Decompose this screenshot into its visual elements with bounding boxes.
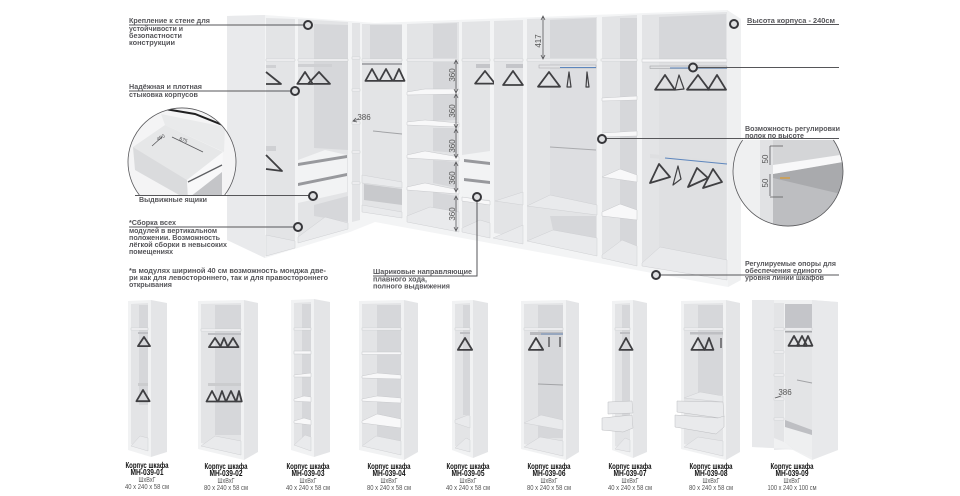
footnote: door mounting: ри как для левостороннего, так и для правостороннего <box>129 274 329 282</box>
callout: wall mounting: конструкции <box>129 39 175 47</box>
product caption: MH-039-04: Корпус шкафа <box>368 462 411 471</box>
product caption: MH-039-03: 40 х 240 х 58 см <box>286 485 330 492</box>
section D <box>527 17 597 256</box>
product caption: MH-039-03: МН-039-03 <box>292 469 325 478</box>
callout: rod <box>689 64 839 72</box>
module MH-039-09: 386 <box>778 388 792 397</box>
callout: drawers <box>135 192 317 204</box>
corner hanging section <box>362 24 404 218</box>
product caption: MH-039-08 <box>689 462 733 492</box>
section B with drawers <box>462 21 495 238</box>
callout: vertical assembly: *Сборка всех <box>129 219 176 227</box>
product caption: MH-039-09 <box>768 462 817 492</box>
callout: drawers: Выдвижные ящики <box>139 196 207 204</box>
product caption: MH-039-07: Корпус шкафа <box>608 462 652 471</box>
magnifier: drawer detail <box>128 108 236 195</box>
callout: wall mounting: устойчивости и <box>129 25 183 33</box>
product caption: MH-039-05: 40 х 240 х 58 см <box>446 485 490 492</box>
callout: vertical assembly <box>129 219 302 256</box>
callout: vertical assembly: лёгкой сборки в невысоких <box>129 241 227 249</box>
product caption: MH-039-09: ШхВхГ <box>784 478 801 485</box>
callout: height <box>730 17 839 28</box>
magnifier: shelf adjustment: 50 <box>761 154 770 163</box>
product caption: MH-039-01 <box>125 461 169 491</box>
magnifier: shelf adjustment <box>730 140 845 230</box>
magnifier: drawer detail: 675 <box>178 136 188 145</box>
dimension markers: 386 <box>357 113 371 122</box>
product caption: MH-039-03: ШхВхГ <box>300 478 317 485</box>
module MH-039-04 <box>359 300 418 460</box>
callout: tight joint: Надёжная и плотная <box>129 83 202 91</box>
callout: height: Высота корпуса - 240см <box>747 17 835 25</box>
product caption: MH-039-03 <box>286 462 330 492</box>
product caption: MH-039-03: Корпус шкафа <box>286 462 330 471</box>
callout: adjustable feet: уровня линии шкафов <box>745 274 825 282</box>
product caption: MH-039-01: 40 х 240 х 58 см <box>125 484 169 491</box>
product caption: MH-039-06: Корпус шкафа <box>528 462 571 471</box>
product caption: MH-039-06: МН-039-06 <box>532 469 566 478</box>
dimension markers <box>353 16 545 231</box>
callout: vertical assembly: модулей в вертикальном <box>129 227 217 235</box>
product caption: MH-039-08: Корпус шкафа <box>690 462 733 471</box>
product caption: MH-039-02 <box>204 462 248 492</box>
callout: wall mounting: Крепление к стене для <box>129 17 210 25</box>
callout: vertical assembly: положении. Возможность <box>129 234 221 242</box>
product caption: MH-039-01: МН-039-01 <box>130 468 164 477</box>
main wardrobe assembly <box>227 10 741 287</box>
product caption: MH-039-02: 80 х 240 х 58 см <box>204 485 248 492</box>
product caption: MH-039-02: ШхВхГ <box>218 478 235 485</box>
callout: wall mounting: безопастности <box>129 32 182 40</box>
product caption: MH-039-04: 80 х 240 х 58 см <box>367 485 411 492</box>
callout: ball guides: Шариковые направляющие <box>373 268 472 276</box>
magnifier: drawer detail: 490 <box>156 133 166 143</box>
product caption: MH-039-08: ШхВхГ <box>702 478 720 485</box>
product caption: MH-039-05: ШхВхГ <box>460 478 477 485</box>
product caption: MH-039-05: МН-039-05 <box>452 469 485 478</box>
product caption: MH-039-04: ШхВхГ <box>380 478 398 485</box>
product caption: MH-039-09: МН-039-09 <box>776 469 809 478</box>
callout: wall mounting <box>129 17 312 47</box>
callout: ball guides <box>373 193 481 290</box>
section E shelves <box>601 15 637 266</box>
callout: ball guides: плавного хода, <box>373 276 427 284</box>
product caption: MH-039-06: 80 х 240 х 58 см <box>527 485 571 492</box>
product caption: MH-039-07 <box>608 462 652 492</box>
module MH-039-03 <box>291 299 330 457</box>
section C <box>493 20 523 244</box>
callout: adjustable feet <box>652 260 839 282</box>
dimension markers: 360 <box>448 104 457 118</box>
section 1 left <box>266 18 295 256</box>
product caption: MH-039-01: Корпус шкафа <box>126 461 169 470</box>
product caption: MH-039-09: Корпус шкафа <box>770 462 814 471</box>
callout: tight joint: стыковка корпусов <box>129 91 199 99</box>
callout: adjustable feet: обеспечения единого <box>745 267 823 275</box>
product caption: MH-039-07: ШхВхГ <box>622 478 639 485</box>
dimension markers: 360 <box>448 68 457 82</box>
section A shelves with dimensions <box>407 22 459 232</box>
module MH-039-07 <box>602 300 647 458</box>
product caption: MH-039-08: МН-039-08 <box>694 469 728 478</box>
magnifier: shelf adjustment: 50 <box>761 178 770 187</box>
module MH-039-08 <box>675 300 740 460</box>
product caption: MH-039-02: Корпус шкафа <box>204 462 248 471</box>
product caption: MH-039-05 <box>446 462 490 492</box>
dimension markers: 417 <box>534 34 543 48</box>
module MH-039-09 <box>752 300 838 460</box>
module MH-039-06 <box>521 300 579 460</box>
module MH-039-05 <box>452 300 488 458</box>
section 2 with drawers <box>297 19 348 243</box>
callout: tight joint <box>129 83 299 99</box>
product caption: MH-039-08: 80 х 240 х 58 см <box>689 485 733 492</box>
callout: shelf adjustment <box>598 125 840 143</box>
dimension markers: 360 <box>448 139 457 153</box>
footnote: door mounting: *в модулях шириной 40 см возможность монджа две- <box>129 267 327 275</box>
product caption: MH-039-06: ШхВхГ <box>540 478 558 485</box>
callout: ball guides: полного выдвижения <box>373 282 450 290</box>
section F with rods and hangers <box>642 12 727 280</box>
callout: adjustable feet: Регулируемые опоры для <box>745 260 836 268</box>
product caption: MH-039-07: 40 х 240 х 58 см <box>608 485 652 492</box>
dimension markers: 360 <box>448 171 457 185</box>
module MH-039-01 <box>128 300 167 457</box>
right side panel <box>727 10 741 287</box>
product caption: MH-039-04 <box>367 462 411 492</box>
product caption: MH-039-07: МН-039-07 <box>614 469 647 478</box>
product caption: MH-039-04: МН-039-04 <box>372 469 406 478</box>
product caption: MH-039-09: 100 х 240 х 100 см <box>768 485 817 492</box>
footnote: door mounting: открывания <box>129 281 172 289</box>
product caption: MH-039-06 <box>527 462 571 492</box>
callout: shelf adjustment: Возможность регулировки <box>745 125 840 133</box>
module MH-039-02 <box>198 300 258 460</box>
dimension markers: 360 <box>448 207 457 221</box>
callout: shelf adjustment: полок по высоте <box>745 132 804 140</box>
product caption: MH-039-05: Корпус шкафа <box>446 462 490 471</box>
left side panel <box>227 15 265 258</box>
product caption: MH-039-01: ШхВхГ <box>138 477 156 484</box>
callout: vertical assembly: помещениях <box>129 248 173 256</box>
corner shelf column <box>352 23 360 222</box>
product caption: MH-039-02: МН-039-02 <box>210 469 243 478</box>
